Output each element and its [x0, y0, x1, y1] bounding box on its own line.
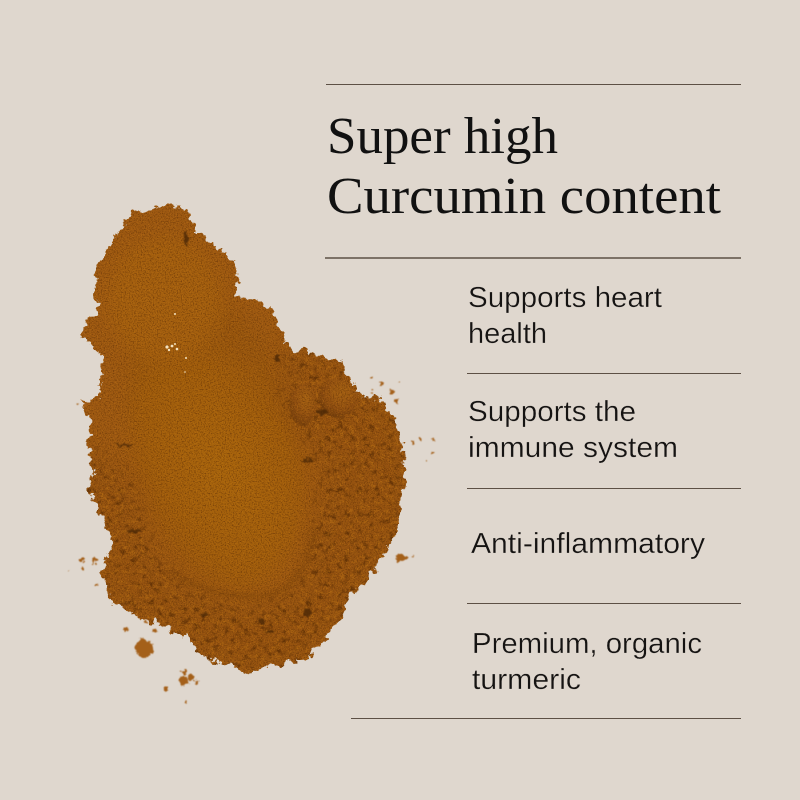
- benefit: immune system: Supports the: [468, 396, 636, 428]
- benefit: heart health: health: [468, 318, 547, 350]
- benefit: premium organic turmeric: [472, 628, 702, 696]
- scattered crumbs: [67, 376, 435, 704]
- clump: rounded lump: [318, 378, 358, 418]
- clump: shadow crevices: [117, 230, 327, 634]
- smooth pressed centre of the powder: [180, 414, 264, 524]
- light powder grain texture: [80, 204, 406, 674]
- divider lines: [325, 84, 741, 718]
- image: turmeric powder pile: [60, 190, 435, 704]
- benefit: anti-inflammatory: Anti-inflammatory: [471, 528, 706, 560]
- benefit: premium organic turmeric: Premium, organic: [472, 628, 702, 660]
- benefit: heart health: Supports heart: [468, 282, 662, 314]
- light clumps around the rim: [80, 340, 415, 680]
- shadow under the pressed centre: [170, 525, 316, 596]
- darker rim tone: [92, 358, 402, 666]
- benefit: immune system: [468, 396, 678, 464]
- benefit: immune system: immune system: [468, 432, 678, 464]
- clumps around the rim: [80, 340, 415, 680]
- upper powder glow: [128, 281, 218, 351]
- infographic canvas: [68, 84, 741, 719]
- clump: side lump: [290, 384, 316, 426]
- powder body: [80, 204, 407, 674]
- highlight sparkle: [165, 313, 187, 373]
- title: Curcumin content: [327, 168, 722, 225]
- title: Super high: [327, 108, 558, 165]
- title: [327, 108, 722, 225]
- benefit: heart health: [468, 282, 662, 350]
- benefit: premium organic turmeric: turmeric: [472, 664, 581, 696]
- powder grain texture: [80, 204, 406, 674]
